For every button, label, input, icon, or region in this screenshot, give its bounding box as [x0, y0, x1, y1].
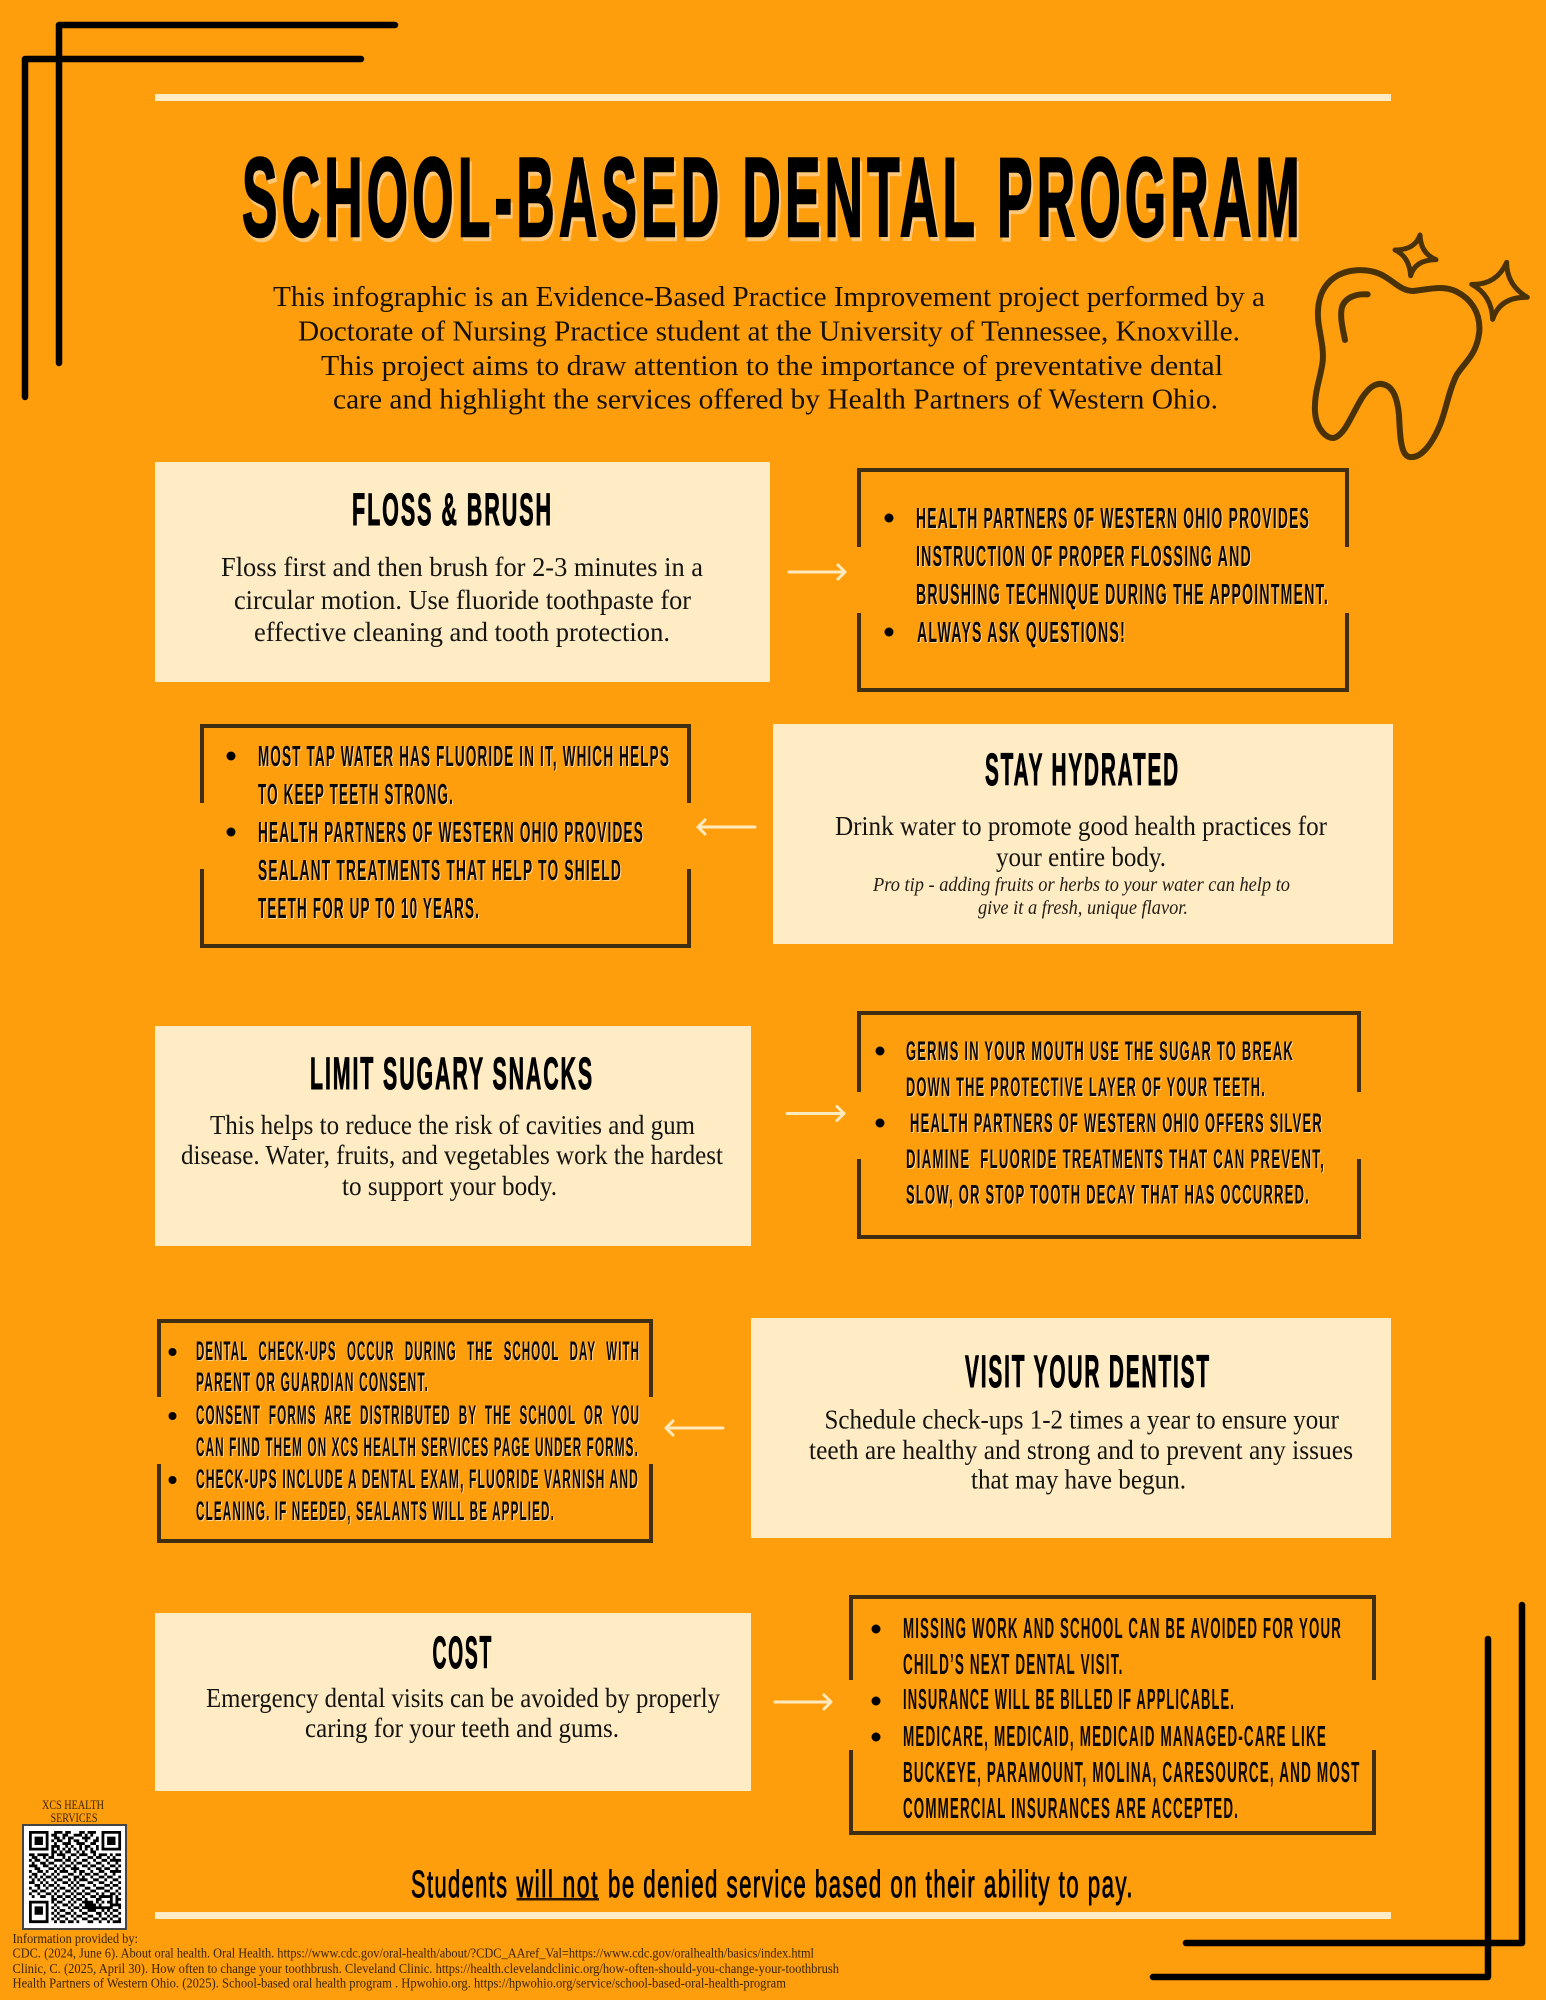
body: floss and brush: effective cleaning and tooth protection.	[254, 616, 670, 647]
body: limit sugary snacks	[181, 1109, 723, 1201]
panel: visit your dentist	[751, 1318, 1391, 1538]
panel: floss and brush	[155, 462, 770, 682]
callout: hydration services: SEALANT TREATMENTS THAT HELP TO SHIELD	[258, 855, 622, 887]
body: limit sugary snacks: disease. Water, fruits, and vegetables work the hardest	[181, 1139, 723, 1170]
body: cost: Emergency dental visits can be avoided by properly	[206, 1682, 720, 1713]
top divider bar	[155, 94, 1391, 101]
callout: hydration services	[202, 726, 689, 946]
callout: hydration services: HEALTH PARTNERS OF WESTERN OHIO PROVIDES	[258, 817, 644, 849]
body: floss and brush: circular motion. Use fluoride toothpaste for	[234, 584, 691, 615]
body: stay hydrated: Pro tip - adding fruits or herbs to your water can help to	[872, 875, 1290, 896]
callout: floss services: ALWAYS ASK QUESTIONS!	[917, 617, 1126, 649]
intro text block: This project aims to draw attention to the importance of preventative dental	[321, 351, 1223, 382]
references: CDC. (2024, June 6). About oral health. Oral Health. https://www.cdc.gov/oral-health/about/?CDC_AAref_Val=https://www.cdc.gov/oralhealth/basics/index.html	[12, 1946, 814, 1960]
footer statement	[411, 1864, 1134, 1906]
intro text block: care and highlight the services offered by Health Partners of Western Ohio.	[333, 384, 1218, 416]
body: visit your dentist: that may have begun.	[971, 1464, 1186, 1494]
panel: cost	[155, 1613, 751, 1791]
QR label	[42, 1798, 104, 1825]
callout: hydration services: TO KEEP TEETH STRONG.	[258, 779, 454, 811]
QR code	[23, 1825, 126, 1929]
callout: check-up services	[159, 1321, 651, 1541]
footer statement: Students	[411, 1864, 508, 1906]
body: stay hydrated: Drink water to promote good health practices for	[835, 810, 1327, 841]
callout: floss services	[859, 470, 1347, 690]
text: DENTAL CHECK-UPS OCCUR DURING THE SCHOOL DAY WITH	[196, 1336, 640, 1366]
body: visit your dentist	[809, 1404, 1353, 1494]
callout: sugar services	[859, 1013, 1359, 1237]
icon: sparkling tooth	[1315, 235, 1527, 457]
body: cost: caring for your teeth and gums.	[305, 1712, 619, 1743]
text: CAN FIND THEM ON XCS HEALTH SERVICES PAGE UNDER FORMS.	[196, 1432, 639, 1462]
references	[12, 1931, 839, 1990]
text: CHECK-UPS INCLUDE A DENTAL EXAM, FLUORIDE VARNISH AND	[196, 1464, 639, 1494]
panel: stay hydrated	[773, 724, 1393, 944]
body: stay hydrated	[835, 810, 1327, 919]
body: visit your dentist: Schedule check-ups 1-2 times a year to ensure your	[824, 1404, 1339, 1434]
body: floss and brush	[221, 551, 703, 647]
arrow: cost to services	[775, 1695, 831, 1709]
corner lines: bottom right	[1153, 1605, 1522, 1977]
footer statement: will not	[516, 1864, 599, 1906]
references: Health Partners of Western Ohio. (2025). School-based oral health program . Hpwohio.org. https://hpwohio.org/service/school-based-oral-health-program	[12, 1976, 786, 1990]
intro text block: Doctorate of Nursing Practice student at the University of Tennessee, Knoxville.	[298, 316, 1240, 348]
QR label: XCS HEALTH	[42, 1798, 104, 1812]
references: Information provided by:	[12, 1931, 138, 1946]
panel: stay hydrated: STAY HYDRATED	[985, 744, 1180, 795]
callout: cost and insurance	[851, 1597, 1374, 1833]
corner lines: top left	[25, 25, 395, 397]
body: stay hydrated: give it a fresh, unique flavor.	[978, 898, 1188, 919]
panel: visit your dentist: VISIT YOUR DENTIST	[965, 1346, 1211, 1397]
intro text block	[273, 282, 1266, 416]
panel: floss and brush: FLOSS & BRUSH	[352, 484, 553, 535]
body: stay hydrated: your entire body.	[996, 841, 1166, 872]
references: Clinic, C. (2025, April 30). How often to change your toothbrush. Cleveland Clinic. https://health.clevelandclinic.org/how-often-should-you-change-your-toothbrush	[12, 1961, 839, 1976]
arrow: hydrated to services	[698, 820, 755, 834]
callout: check-up services: CLEANING. IF NEEDED, SEALANTS WILL BE APPLIED.	[196, 1496, 555, 1526]
arrow: snacks to services	[787, 1106, 844, 1120]
panel: limit sugary snacks	[155, 1026, 751, 1246]
callout: check-up services: PARENT OR GUARDIAN CONSENT.	[196, 1367, 429, 1397]
body: limit sugary snacks: This helps to reduce the risk of cavities and gum	[210, 1109, 695, 1140]
arrow: dentist to services	[666, 1421, 723, 1435]
callout: cost and insurance: CHILD’S NEXT DENTAL VISIT.	[903, 1649, 1124, 1681]
text: CONSENT FORMS ARE DISTRIBUTED BY THE SCHOOL OR YOU	[196, 1400, 640, 1430]
intro text block: This infographic is an Evidence-Based Practice Improvement project performed by a	[273, 282, 1266, 313]
panel: cost: COST	[432, 1627, 493, 1678]
body: floss and brush: Floss first and then brush for 2-3 minutes in a	[221, 551, 703, 582]
body: visit your dentist: teeth are healthy and strong and to prevent any issues	[809, 1434, 1353, 1465]
QR label: SERVICES	[50, 1811, 98, 1825]
panel: limit sugary snacks: LIMIT SUGARY SNACKS	[310, 1048, 594, 1099]
text: MOST TAP WATER HAS FLUORIDE IN IT, WHICH HELPS	[258, 741, 670, 773]
body: cost	[206, 1682, 720, 1743]
arrow: floss to services	[789, 565, 845, 579]
callout: hydration services: TEETH FOR UP TO 10 YEARS.	[258, 893, 480, 925]
bottom divider bar	[155, 1912, 1391, 1919]
body: limit sugary snacks: to support your body.	[342, 1170, 557, 1201]
footer statement: be denied service based on their ability to pay.	[608, 1864, 1134, 1906]
